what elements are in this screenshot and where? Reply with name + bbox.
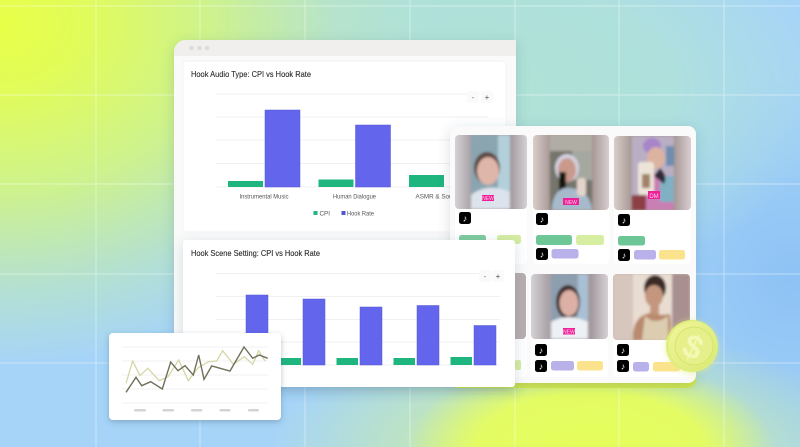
bar chart: audio type [216, 94, 488, 200]
legend: CPI [320, 210, 330, 218]
creative card 3: DM [649, 194, 659, 200]
tag chips: ♪ [622, 250, 626, 260]
icon: gold dollar coin: $ [677, 326, 709, 367]
zoom controls [467, 91, 493, 103]
zoom controls: - [484, 272, 487, 281]
TikTok icons: ♪ [621, 362, 625, 372]
bar chart: scene setting [216, 274, 500, 365]
creative card 2 [533, 135, 609, 264]
legend: Hook Rate [347, 210, 374, 218]
light line series [126, 351, 265, 383]
panel: hook scene setting chart [183, 240, 515, 387]
chart title: Hook Scene Setting: CPI vs Hook Rate [191, 248, 320, 258]
window title bar [174, 40, 516, 56]
bar chart: audio type: Instrumental Music [240, 194, 288, 200]
zoom controls: + [485, 93, 490, 102]
creative card 5 [531, 274, 608, 377]
icon: gold dollar coin [665, 320, 719, 374]
tag chips [633, 362, 680, 372]
TikTok icon: ♪ [622, 216, 626, 226]
zoom controls: - [472, 93, 475, 102]
TikTok icons: ♪ [539, 362, 543, 372]
TikTok icons [535, 344, 547, 372]
legend [314, 210, 374, 218]
browser window [174, 40, 516, 387]
zoom controls [479, 270, 504, 282]
creative card 5: NEW [563, 330, 575, 336]
tag chips [551, 361, 603, 370]
bar chart: audio type: Human Dialogue [333, 194, 376, 200]
creative card 1 [455, 135, 527, 244]
creative card 6 [613, 274, 690, 377]
tag chips: ♪ [540, 250, 544, 260]
TikTok icons [617, 344, 629, 372]
creative card 3 [614, 136, 691, 264]
panel: creative thumbnails grid [450, 126, 696, 388]
zoom controls: + [496, 272, 501, 281]
axis placeholders [134, 409, 259, 412]
creative card 1: NEW [482, 196, 494, 202]
TikTok icons: ♪ [621, 346, 625, 356]
TikTok icon: ♪ [463, 214, 467, 224]
dark line series [126, 347, 268, 392]
creative card 2: NEW [565, 200, 577, 206]
panel: hook audio type chart [183, 61, 506, 232]
TikTok icon: ♪ [540, 214, 544, 224]
panel: line chart card [109, 333, 281, 420]
bar chart: audio type: ASMR & Sound [416, 194, 460, 200]
creative card 4 [455, 273, 527, 377]
chart title: Hook Audio Type: CPI vs Hook Rate [191, 69, 311, 79]
TikTok icons: ♪ [539, 346, 543, 356]
tag chips [459, 235, 521, 244]
